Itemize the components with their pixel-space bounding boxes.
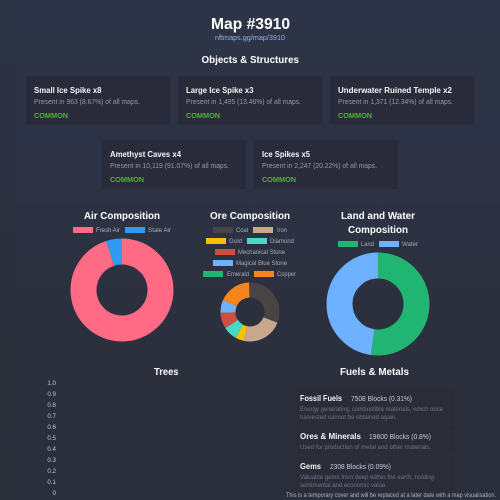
row: gems — [296, 456, 455, 492]
panel: ice spikes: Ice Spikes x5 — [262, 150, 311, 159]
row: fossil fuels: 7508 Blocks (0.31%) — [351, 396, 412, 403]
row: fossil fuels: Fossil Fuels — [300, 394, 343, 403]
panel: trees chart — [47, 367, 179, 497]
panel: amethyst caves — [102, 140, 246, 189]
chart axis labels: 0.3 — [47, 457, 57, 464]
chart axis labels: 0.8 — [47, 402, 57, 409]
row: ores and minerals: Ores & Minerals — [300, 432, 362, 441]
legend: ores: Magical Blue Stone — [236, 261, 288, 267]
legend: air: Fresh Air — [96, 228, 120, 234]
chart axis labels: 0.9 — [47, 391, 57, 398]
panel: ice spikes: COMMON — [262, 177, 296, 184]
legend: ores: Mechanical Stone — [238, 250, 286, 256]
panel: small ice spike: Small Ice Spike x8 — [34, 86, 102, 95]
heading: objects and structures: Objects & Structures — [202, 55, 299, 66]
row: ores and minerals — [296, 426, 455, 454]
legend: land and water: Land — [361, 242, 374, 248]
row: gems: Valuable gems from deep within the earth, holding — [300, 475, 434, 481]
panel: large ice spike: Large Ice Spike x3 — [186, 86, 254, 95]
row: ores and minerals: 19600 Blocks (0.8%) — [369, 434, 431, 441]
legend: ores: Copper — [277, 272, 296, 278]
heading: land and water composition — [341, 211, 415, 236]
panel: amethyst caves: Amethyst Caves x4 — [110, 150, 182, 159]
legend: land and water: Water — [402, 242, 418, 248]
legend: ores: Gold — [229, 239, 242, 245]
panel: fuels and metals — [296, 367, 455, 492]
panel: underwater ruined temple — [330, 76, 474, 124]
panel: amethyst caves: Present in 10,119 (91.07%) of all maps. — [110, 161, 229, 170]
panel: land and water composition — [338, 211, 418, 342]
heading: land and water composition: Composition — [348, 225, 408, 236]
panel: ice spikes: Present in 2,247 (20.22%) of all maps. — [262, 161, 377, 170]
legend: ores: Emerald — [227, 272, 249, 278]
chart axis labels: 0.2 — [47, 468, 57, 475]
panel: underwater ruined temple: COMMON — [338, 113, 372, 120]
row: fossil fuels: Energy generating, combustible materials, which once — [300, 407, 444, 413]
legend: ores — [203, 227, 296, 278]
row: fossil fuels — [296, 388, 455, 424]
panel: large ice spike: Present in 1,495 (13.46%) of all maps. — [186, 97, 301, 106]
panel: ice spikes — [254, 140, 398, 189]
row: gems: 2308 Blocks (0.09%) — [330, 464, 391, 471]
panel: large ice spike: COMMON — [186, 113, 220, 120]
panel: small ice spike — [26, 76, 170, 124]
donut chart: land and water — [340, 266, 416, 342]
chart axis labels: 0.6 — [47, 424, 57, 431]
row: ores and minerals: Used for production of metal and other materials. — [300, 445, 431, 451]
heading: land and water composition: Land and Water — [341, 211, 415, 222]
legend: air — [73, 227, 171, 234]
legend: ores: Coal — [236, 228, 248, 234]
legend: air: Stale Air — [148, 228, 171, 234]
row: gems: sentimental and economic value. — [300, 483, 387, 489]
chart axis labels — [47, 380, 57, 497]
donut chart: air — [84, 252, 160, 328]
title: Map #3910 — [211, 16, 290, 33]
chart axis labels: 0.5 — [47, 435, 57, 442]
chart axis labels: 0.4 — [47, 446, 57, 453]
panel: air composition — [73, 211, 171, 328]
legend: ores: Iron — [277, 228, 287, 234]
panel: amethyst caves: COMMON — [110, 177, 144, 184]
panel: small ice spike: COMMON — [34, 113, 68, 120]
row: fossil fuels: harvested cannot be obtained again. — [300, 415, 397, 421]
legend: ores: Diamond — [270, 239, 294, 245]
map link: nftmaps.gg/map/3910 — [215, 35, 285, 42]
panel: ore composition — [203, 211, 296, 334]
legend: land and water — [338, 241, 418, 248]
panel: small ice spike: Present in 963 (8.67%) of all maps. — [34, 97, 140, 106]
donut chart: ores — [228, 290, 272, 334]
heading: fuels and metals: Fuels & Metals — [340, 367, 409, 378]
chart axis labels: 0.7 — [47, 413, 57, 420]
chart axis labels: 1.0 — [47, 380, 57, 387]
heading: trees: Trees — [154, 367, 179, 378]
chart axis labels: 0 — [53, 490, 57, 497]
heading: ore composition: Ore Composition — [210, 211, 290, 222]
chart axis labels: 0.1 — [47, 479, 57, 486]
heading: air composition: Air Composition — [84, 211, 160, 222]
panel: large ice spike — [178, 76, 322, 124]
panel: underwater ruined temple: Present in 1,371 (12.34%) of all maps. — [338, 97, 453, 106]
row: gems: Gems — [300, 462, 322, 471]
panel: underwater ruined temple: Underwater Ruined Temple x2 — [338, 86, 453, 95]
